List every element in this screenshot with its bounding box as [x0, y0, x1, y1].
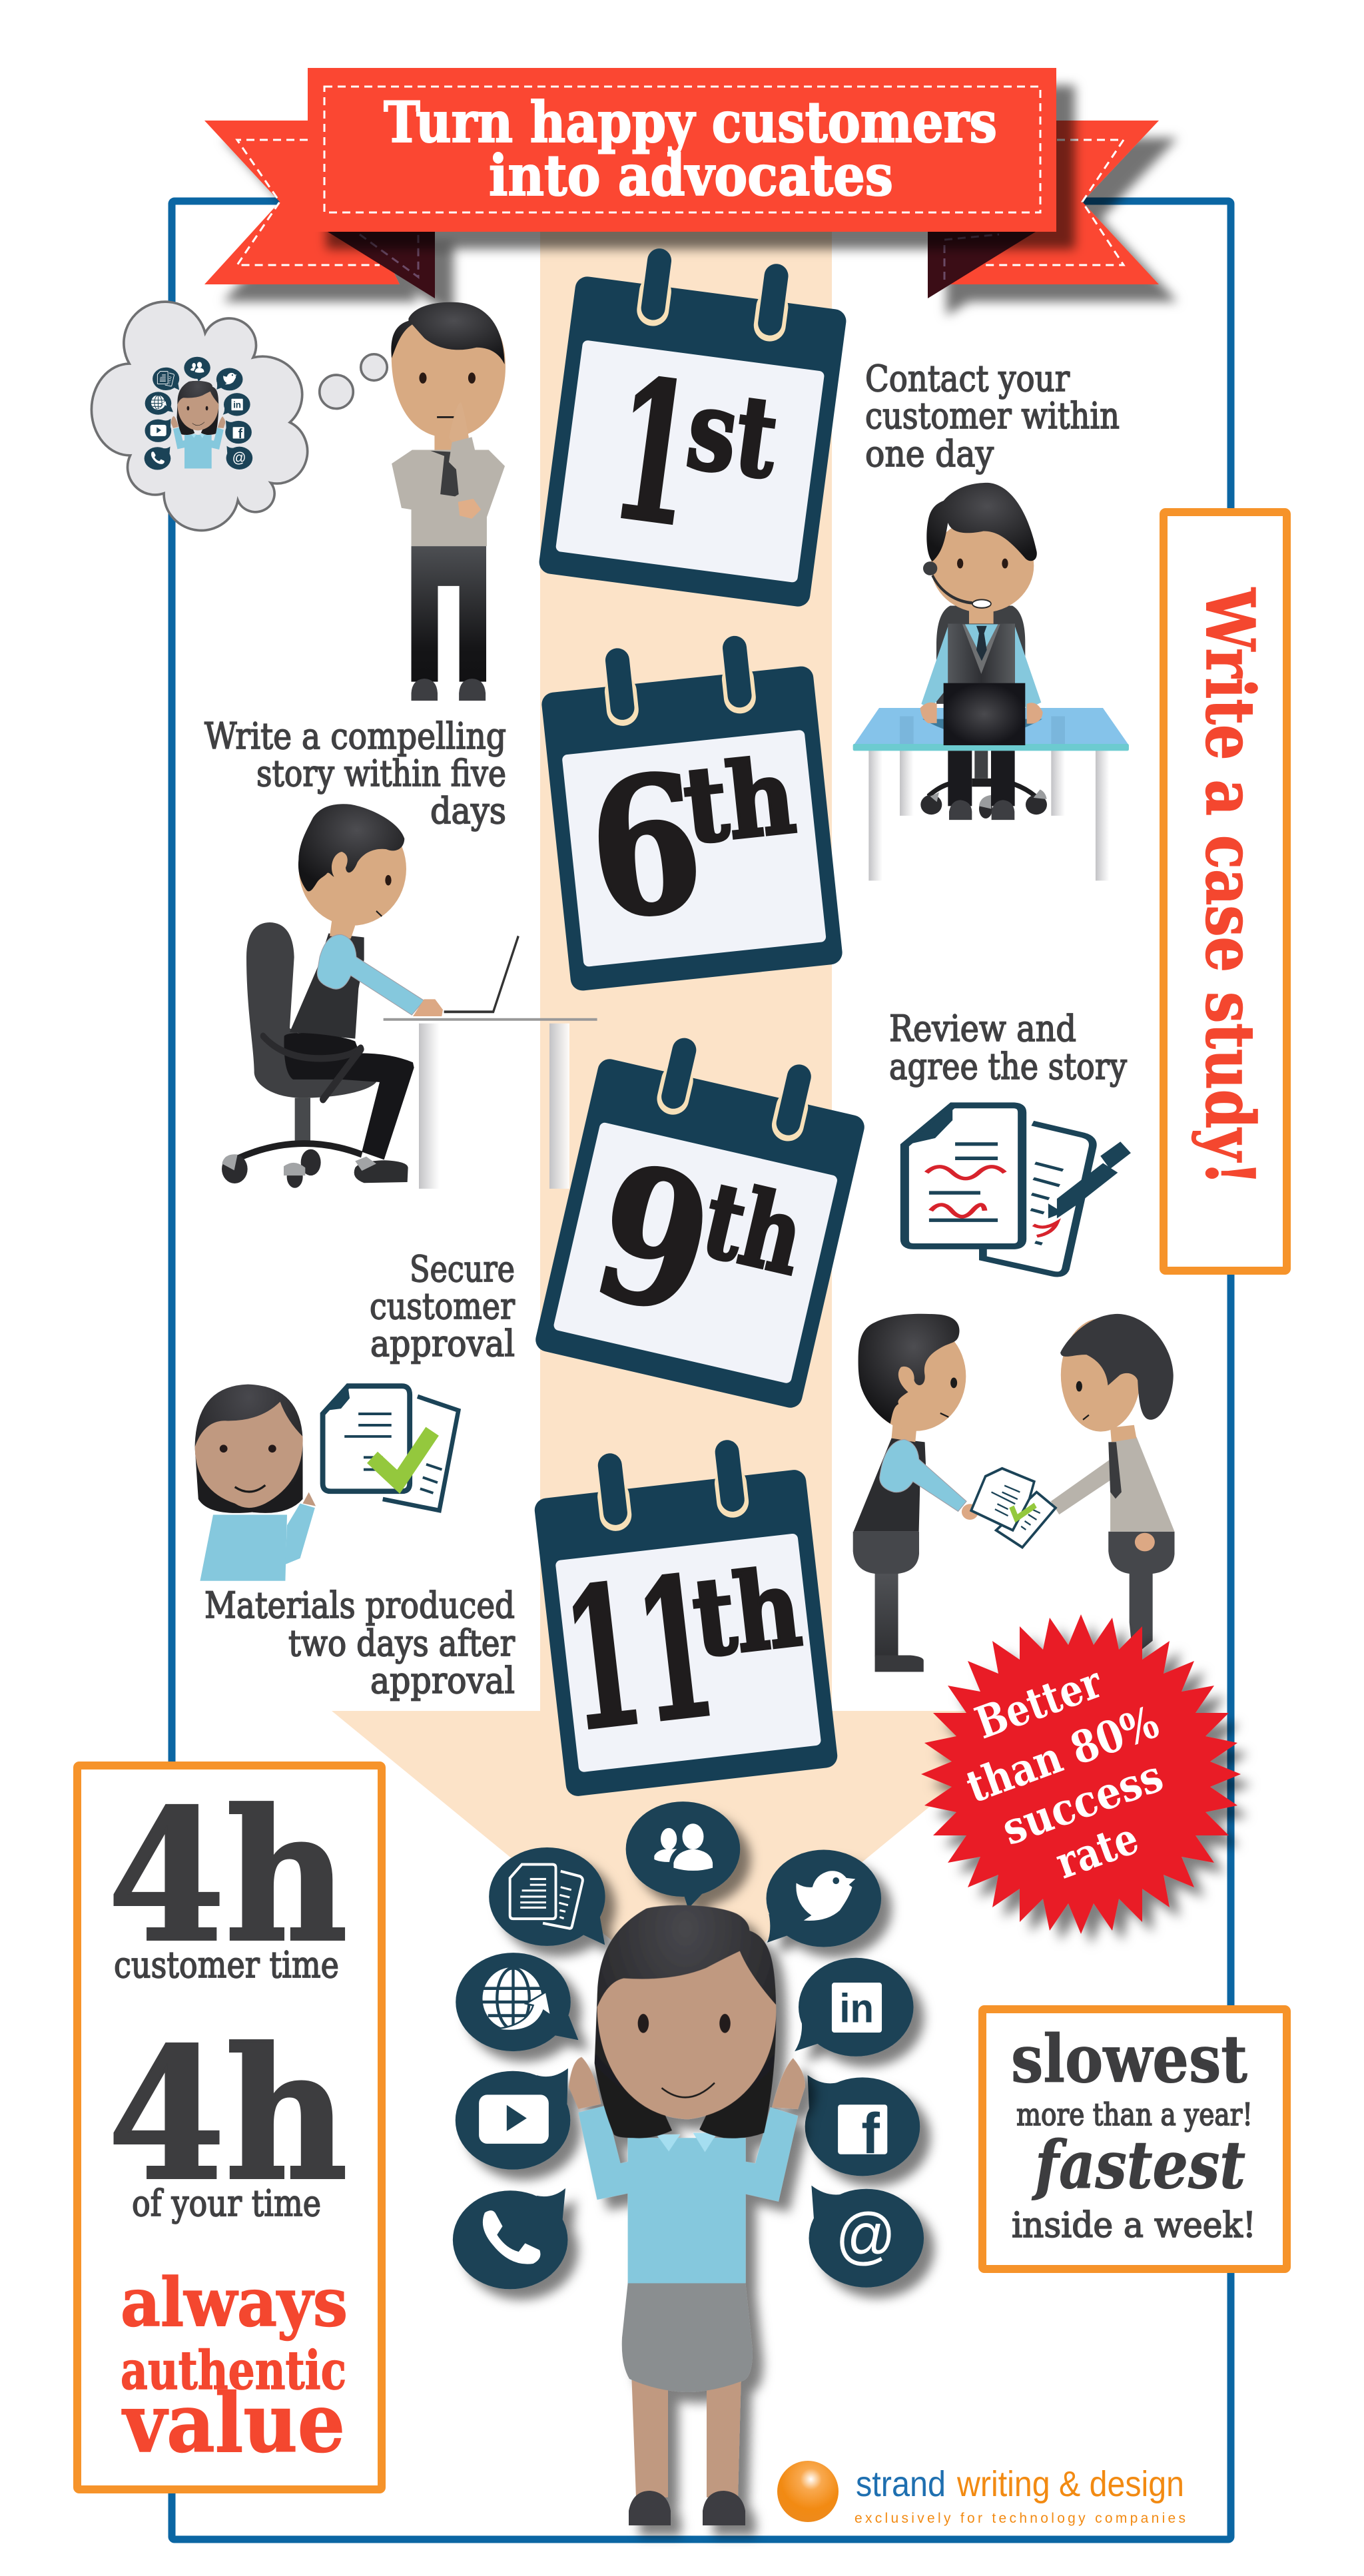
panel: time and value facts: [77, 1766, 382, 2489]
cloud shape: [91, 302, 308, 530]
date 11th: 11: [554, 1534, 724, 1774]
right man: [1051, 1314, 1175, 1656]
text: contact your customer: Contact your: [865, 358, 1070, 400]
text: secure customer approval: Secure: [410, 1248, 515, 1290]
text: secure customer approval: approval: [370, 1323, 515, 1365]
date 9th: th: [693, 1158, 815, 1299]
text: materials produced: [204, 1584, 515, 1702]
text: contact your customer: customer within: [865, 395, 1120, 437]
text: write a compelling story: days: [430, 790, 506, 832]
title text: Turn happy customers: [384, 89, 997, 155]
logo tagline: exclusively for technology companies: [854, 2511, 1186, 2526]
text: always authentic value: always: [121, 2263, 348, 2342]
icon: signed document: [971, 1468, 1056, 1547]
character: seated man at laptop: [222, 804, 597, 1189]
calendar: 6th: [537, 628, 843, 992]
woman with social media icon bubbles: [453, 1801, 924, 2525]
bubble: globe: [456, 1953, 578, 2051]
stat: 4h customer time: 4h: [108, 1770, 348, 1982]
banner ribbon tails: [204, 121, 1159, 298]
starburst text: Better: [968, 1656, 1109, 1749]
title text: into advocates: [489, 143, 893, 208]
starburst: success rate: [921, 1614, 1241, 1934]
icon: approved document: [323, 1386, 458, 1510]
logo orange ball: [777, 2461, 839, 2522]
bubble: phone: [453, 2188, 567, 2289]
calendar: 11th: [529, 1432, 839, 1797]
text: always authentic value: value: [121, 2375, 345, 2471]
starburst text: than 80%: [960, 1696, 1165, 1813]
text: review and agree: agree the story: [889, 1046, 1127, 1088]
text: fastest: fastest: [1032, 2127, 1245, 2204]
bubble: linkedin: in: [839, 1985, 874, 2031]
text: write a compelling story: [204, 715, 506, 832]
text: more than a year: more than a year!: [1016, 2096, 1253, 2132]
logo wordmark orange part: writing & design: [956, 2464, 1184, 2504]
date 1st: st: [681, 364, 785, 503]
title text: [384, 89, 997, 208]
thought bubbles: [320, 354, 387, 409]
starburst text: [960, 1656, 1170, 1889]
bubble: facebook: f: [861, 2100, 880, 2166]
stat: 4h customer time: customer time: [114, 1944, 339, 1986]
calendar: 9th: [533, 1020, 875, 1410]
vertical heading: Write a case study!: [1191, 587, 1269, 1185]
bubble: people: [626, 1801, 740, 1909]
character: two men shaking hands over document: [853, 1314, 1175, 1672]
stat: 4h of your time: 4h: [108, 2009, 348, 2220]
text: secure customer approval: customer: [370, 1285, 515, 1327]
text: contact your customer: [865, 358, 1120, 475]
text: always authentic value: authentic: [121, 2339, 346, 2402]
text: materials produced: Materials produced: [204, 1584, 515, 1626]
bubble: twitter: [767, 1850, 881, 1947]
bubble: linkedin: [795, 1958, 914, 2057]
character: thinking man: [391, 302, 506, 701]
text: write a compelling story: Write a compelling: [204, 715, 506, 757]
text: review and agree: Review and: [889, 1008, 1076, 1050]
date 6th: [579, 733, 801, 962]
central beige arrow: [332, 226, 1046, 2004]
character: man at desk with headset: [853, 483, 1129, 880]
date 1st: 1: [601, 336, 707, 569]
text: materials produced: approval: [370, 1660, 515, 1702]
panel: slowest and fastest: [982, 2009, 1287, 2269]
woman figure: [569, 1905, 805, 2525]
text: always authentic value: [121, 2263, 348, 2471]
title banner: [204, 68, 1159, 298]
text: secure customer approval: [370, 1248, 515, 1365]
bubble: video play: [456, 2069, 570, 2170]
character: woman with approved document: [195, 1385, 458, 1581]
icon bubbles group: [453, 1801, 924, 2289]
logo wordmark: strand: [856, 2464, 946, 2504]
date 6th: 6: [579, 733, 712, 962]
text: review and agree: [889, 1008, 1127, 1088]
text: write a compelling story: story within five: [256, 753, 506, 795]
starburst text: success: [995, 1750, 1170, 1855]
woman legs and skirt: [622, 2281, 753, 2525]
bubble: documents: [489, 1847, 605, 1946]
panel: write a case study: [1164, 512, 1287, 1271]
mini icon cluster: [145, 357, 252, 470]
starburst text: rate: [1049, 1811, 1145, 1889]
woman upper body: [569, 1905, 805, 2284]
bubble: facebook: [805, 2075, 920, 2176]
text: slowest: slowest: [1011, 2021, 1247, 2098]
date 11th: th: [687, 1545, 807, 1681]
bubble: email at sign: [809, 2186, 924, 2288]
text: contact your customer: one day: [865, 433, 994, 475]
stat: 4h of your time: of your time: [132, 2182, 321, 2224]
text: materials produced: two days after: [288, 1622, 515, 1664]
left man: [853, 1314, 978, 1672]
banner main panel: [308, 68, 1056, 232]
date 9th: 9: [577, 1123, 729, 1357]
bubble: email at sign: @: [835, 2200, 896, 2270]
calendar: 1st: [537, 238, 852, 608]
logo: strand writing and design: [777, 2461, 1186, 2526]
blue outer frame: [172, 201, 1231, 2539]
text: inside a week: inside a week!: [1012, 2206, 1256, 2246]
date 6th: th: [679, 735, 801, 867]
thought cloud with small woman and icons: [91, 302, 387, 530]
icon: document with red corrections and pen: [904, 1106, 1131, 1274]
